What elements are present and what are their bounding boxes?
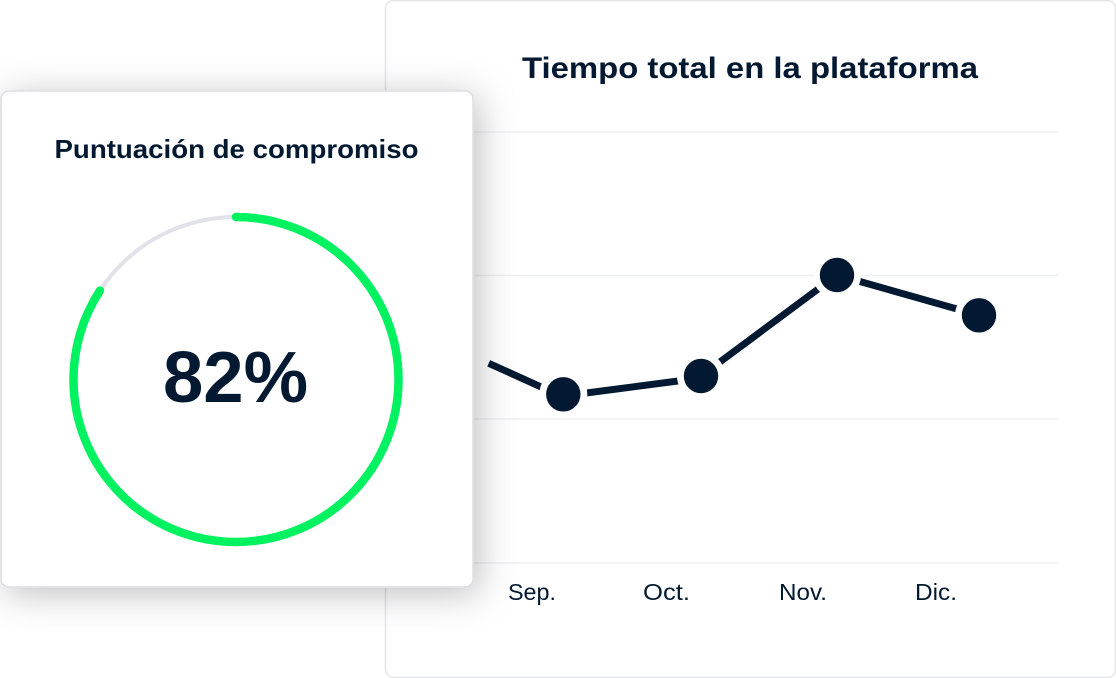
x axis labels (508, 579, 957, 605)
chart title: Tiempo total en la plataforma (522, 52, 978, 85)
line chart (489, 254, 1000, 415)
gauge track (74, 217, 398, 542)
card title: Puntuación de compromiso (54, 134, 418, 164)
gauge progress (74, 217, 398, 542)
gauge value: 82% (163, 338, 308, 418)
grid lines (470, 132, 1058, 563)
panel: puntuación de compromiso (1, 91, 473, 587)
x axis labels: Dic. (915, 579, 957, 605)
x axis labels: Sep. (508, 579, 556, 605)
panel: tiempo total en la plataforma (386, 0, 1116, 678)
x axis labels: Oct. (643, 579, 690, 605)
x axis labels: Nov. (779, 579, 827, 605)
